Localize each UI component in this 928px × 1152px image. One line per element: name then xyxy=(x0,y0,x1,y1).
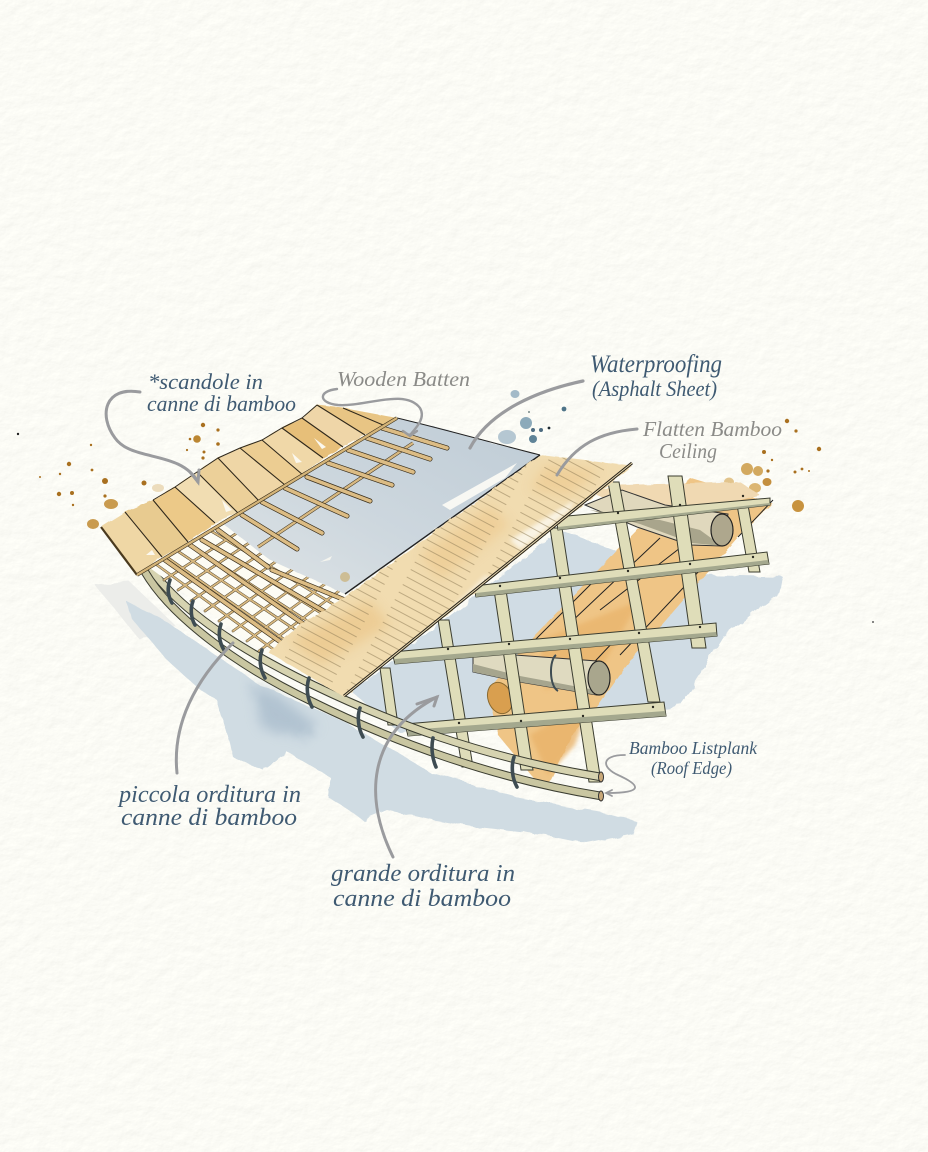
label: piccola orditura: piccola orditura in xyxy=(117,782,301,808)
arrow: scandole xyxy=(106,391,199,482)
label: grande orditura: canne di bamboo xyxy=(333,886,511,912)
label: wooden batten: Wooden Batten xyxy=(337,367,470,391)
pole ends xyxy=(598,772,604,782)
label: scandole: *scandole in xyxy=(148,369,263,394)
label: bamboo listplank: Bamboo Listplank xyxy=(629,738,758,758)
flatten bamboo ceiling xyxy=(268,455,633,698)
label: scandole xyxy=(147,369,296,416)
crossing batten on sheet xyxy=(258,443,413,547)
label: bamboo listplank: (Roof Edge) xyxy=(651,758,732,779)
arrow: grande orditura xyxy=(376,697,437,857)
label: scandole: canne di bamboo xyxy=(147,391,296,416)
label: piccola orditura: canne di bamboo xyxy=(121,805,297,831)
label: flatten bamboo ceiling: Flatten Bamboo xyxy=(642,417,782,441)
arrow: flatten bamboo xyxy=(557,429,637,475)
label: flatten bamboo ceiling xyxy=(642,417,782,463)
label: bamboo listplank xyxy=(629,738,758,779)
curved roof edge poles xyxy=(145,565,604,801)
label: waterproofing: (Asphalt Sheet) xyxy=(592,376,717,401)
beam nails xyxy=(447,495,754,724)
arrow: piccola orditura xyxy=(176,643,233,773)
arrow: bamboo listplank xyxy=(606,755,635,796)
rope bindings xyxy=(168,580,517,787)
arrow: wooden batten xyxy=(323,389,422,436)
label: grande orditura: grande orditura in xyxy=(331,861,515,887)
small bamboo lattice xyxy=(157,531,339,651)
upper log xyxy=(585,490,733,546)
horizontal beams xyxy=(392,498,770,736)
splatters xyxy=(17,419,874,623)
label: grande orditura xyxy=(331,861,515,912)
label: waterproofing: Waterproofing xyxy=(590,351,722,378)
label: flatten bamboo ceiling: Ceiling xyxy=(659,439,717,463)
asphalt sheet xyxy=(222,418,540,594)
label: waterproofing xyxy=(590,351,722,401)
orange flattened bamboo xyxy=(488,478,773,782)
vertical beams xyxy=(380,476,760,782)
right framework with orange bamboo and logs xyxy=(380,476,773,782)
crossing batten highlight xyxy=(258,443,413,547)
watercolor wash: lower left shadow xyxy=(95,582,637,843)
lower log xyxy=(473,652,610,717)
lattice background xyxy=(150,524,345,655)
arrow: waterproofing xyxy=(470,381,583,448)
watercolor wash: behind right framework xyxy=(352,530,783,733)
shingles xyxy=(101,405,397,575)
label: piccola orditura xyxy=(117,782,301,831)
blue splatters xyxy=(498,390,566,444)
wooden battens xyxy=(165,428,447,643)
